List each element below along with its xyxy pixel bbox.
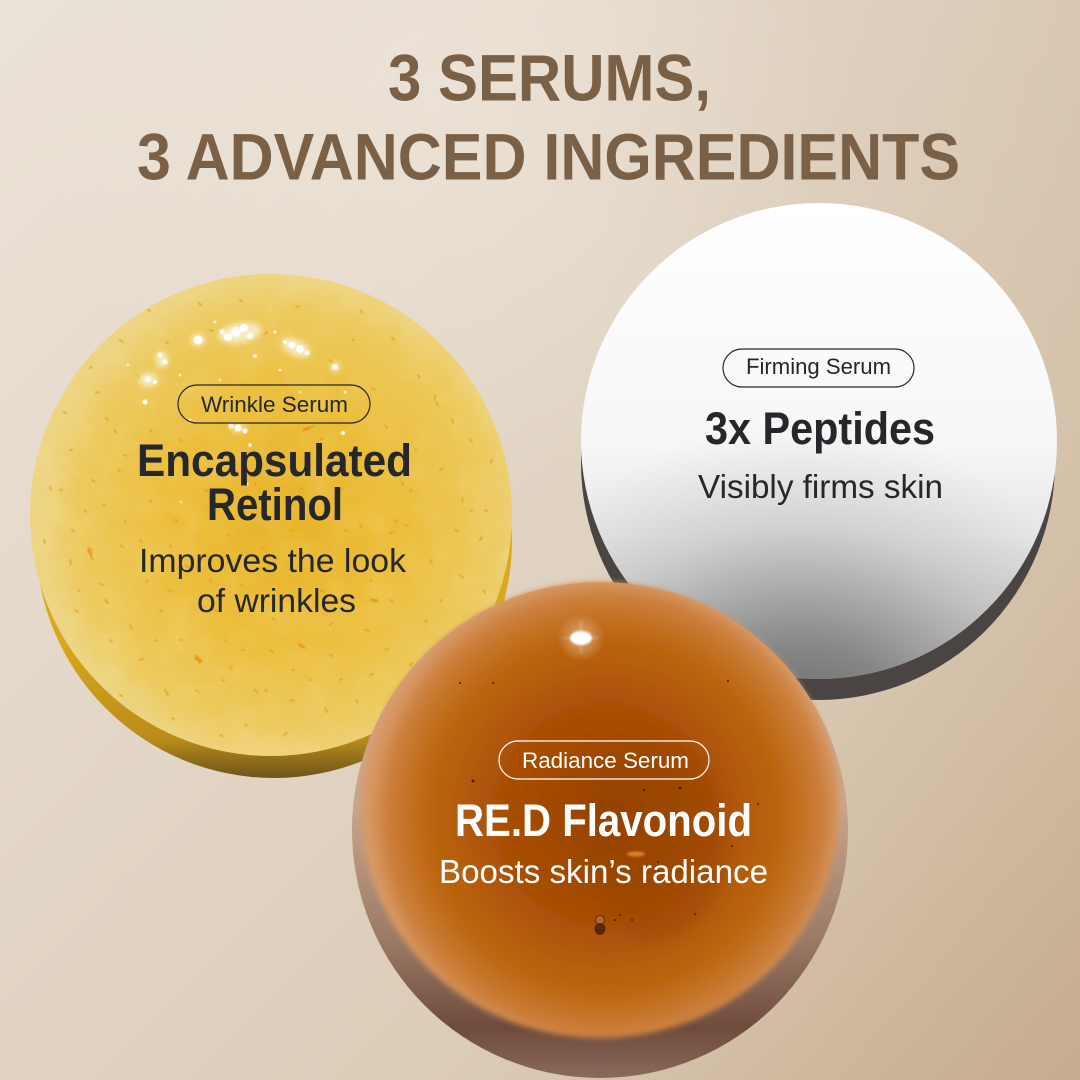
heading: encapsulated retinol: Retinol <box>207 479 343 530</box>
air bubble <box>594 916 606 935</box>
heading: 3x peptides: 3x Peptides <box>705 403 935 454</box>
panel: wrinkle serum yellow blob <box>30 273 512 778</box>
heading: re.d flavonoid: RE.D Flavonoid <box>455 795 752 846</box>
heading: encapsulated retinol <box>137 435 412 530</box>
amber blob face <box>361 582 839 1038</box>
description: improves the look of wrinkles: Improves the look <box>139 542 406 579</box>
white blob face <box>581 203 1057 679</box>
description: improves the look of wrinkles <box>139 542 406 619</box>
description: boosts skin's radiance: Boosts skin’s radiance <box>439 853 768 890</box>
title: 3 SERUMS, <box>388 40 711 114</box>
light star highlight <box>557 614 605 662</box>
central dark swirl <box>585 740 725 940</box>
tag: firming serum: Firming Serum <box>746 354 891 379</box>
title: 3 ADVANCED INGREDIENTS <box>137 120 960 194</box>
sparkle highlights <box>127 319 346 503</box>
tag: wrinkle serum: Wrinkle Serum <box>201 392 348 417</box>
inner glint <box>627 852 645 856</box>
title <box>137 40 960 194</box>
yellow blob face <box>30 274 512 756</box>
description: improves the look of wrinkles: of wrinkles <box>197 582 356 619</box>
yellow blob thick edge shadow <box>36 302 512 778</box>
panel: radiance serum amber blob <box>352 582 848 1078</box>
amber blob rim <box>352 582 848 1078</box>
heading: encapsulated retinol: Encapsulated <box>137 435 412 486</box>
yellow mottled texture <box>30 273 512 757</box>
description: visibly firms skin: Visibly firms skin <box>698 468 943 505</box>
tag: wrinkle serum <box>178 385 370 423</box>
golden flecks <box>44 300 492 745</box>
tag: radiance serum <box>499 741 709 779</box>
tag: radiance serum: Radiance Serum <box>522 748 689 773</box>
panel: firming serum white blob <box>581 203 1057 700</box>
tiny dark specks <box>459 680 759 921</box>
tag: firming serum <box>723 349 914 387</box>
white blob edge shadow <box>581 226 1055 700</box>
